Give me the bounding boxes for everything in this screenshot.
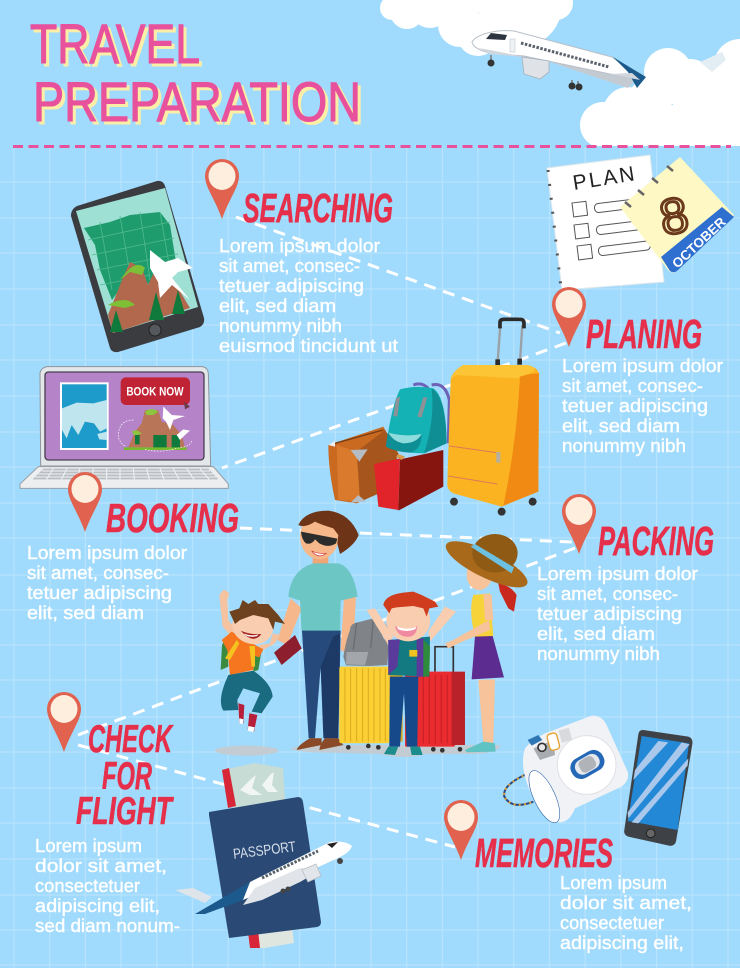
text: planing body: Lorem ipsum dolor [562, 356, 723, 376]
icon: passport with tickets and plane [175, 763, 352, 948]
icon: tablet with map [71, 181, 204, 352]
icon: booking pin [68, 472, 102, 532]
text: searching body [219, 236, 398, 356]
heading: memories: MEMORIES [475, 830, 613, 876]
left boy [219, 589, 285, 732]
yellow suitcase [339, 667, 403, 750]
panel: check for flight [35, 692, 180, 936]
text: searching body: tetuer adipiscing [219, 276, 364, 296]
text: booking body: sit amet, consec- [27, 563, 169, 583]
icon: memories pin [444, 800, 478, 860]
text: packing body [537, 564, 698, 664]
icon: plan notebook and calendar [547, 155, 734, 290]
airplane: top right [472, 31, 646, 90]
panel: searching [205, 159, 398, 356]
heading: searching: SEARCHING [243, 185, 393, 231]
title [30, 12, 364, 136]
text: planing body: sit amet, consec- [562, 376, 703, 396]
icon: laptop booking screen [20, 367, 228, 488]
text: check body: adipiscing elit, [35, 896, 160, 916]
text: planing body: nonummy nibh [562, 436, 686, 456]
text: searching body: Lorem ipsum dolor [219, 236, 380, 256]
text: memories body: adipiscing elit, [560, 933, 684, 953]
text: planing body [562, 356, 723, 456]
text: planing body: tetuer adipiscing [562, 396, 708, 416]
man [277, 511, 359, 750]
icon: plan notebook and calendar: OCTOBER [669, 214, 729, 271]
text: packing body: tetuer adipiscing [537, 604, 682, 624]
text: check body: consectetuer [35, 876, 140, 896]
gray backpack [343, 618, 390, 666]
text: memories body: Lorem ipsum [560, 873, 667, 893]
text: memories body [560, 873, 692, 953]
text: searching body: euismod tincidunt ut [219, 336, 398, 356]
panel: planing [552, 287, 723, 456]
text: check body: sed diam nonum- [35, 916, 180, 936]
title: TRAVEL [30, 12, 200, 75]
text: searching body: nonummy nibh [219, 316, 342, 336]
text: planing body: elit, sed diam [562, 416, 680, 436]
red suitcase [405, 647, 465, 753]
heading: check for flight: CHECK [88, 718, 174, 761]
title: PREPARATION [36, 73, 364, 136]
icon: plan notebook and calendar: 8 [655, 186, 693, 246]
route: dashed connector lines [78, 217, 575, 847]
text: booking body [27, 543, 187, 623]
icon: searching pin [205, 159, 239, 219]
text: booking body: tetuer adipiscing [27, 583, 172, 603]
heading: check for flight [76, 718, 174, 833]
text: booking body: elit, sed diam [27, 603, 144, 623]
icon: instant camera [504, 716, 628, 827]
icon: smartphone [624, 730, 692, 846]
text: packing body: nonummy nibh [537, 644, 660, 664]
panel: packing [537, 494, 714, 664]
text: packing body: sit amet, consec- [537, 584, 678, 604]
panel: booking [27, 472, 239, 623]
middle boy [367, 592, 456, 755]
illustration: family with suitcases [215, 511, 533, 757]
icon: planing pin [552, 287, 586, 347]
icon: passport with tickets and plane: PASSPORT [232, 839, 297, 863]
heading: check for flight: FLIGHT [76, 790, 174, 833]
cloud: top right [580, 39, 740, 148]
text: check body: Lorem ipsum [35, 836, 142, 856]
title: TRAVEL [33, 15, 203, 78]
text: packing body: Lorem ipsum dolor [537, 564, 698, 584]
book [274, 635, 302, 665]
woman [440, 533, 533, 752]
text: booking body: Lorem ipsum dolor [27, 543, 187, 563]
text: memories body: consectetuer [560, 913, 664, 933]
icon: luggage pile [328, 319, 539, 516]
cloud: top centre [380, 0, 573, 56]
text: searching body: sit amet, consec- [219, 256, 360, 276]
text: searching body: elit, sed diam [219, 296, 336, 316]
heading: booking: BOOKING [106, 495, 239, 541]
panel: memories [444, 800, 692, 953]
text: check body: dolor sit amet, [35, 856, 167, 876]
icon: laptop booking screen: BOOK NOW [126, 386, 184, 399]
title: PREPARATION [33, 70, 361, 133]
icon: check pin [47, 692, 81, 752]
text: memories body: dolor sit amet, [560, 893, 692, 913]
text: check body [35, 836, 180, 936]
icon: packing pin [562, 494, 596, 554]
icon: plan notebook and calendar: PLAN [571, 163, 636, 195]
text: packing body: elit, sed diam [537, 624, 655, 644]
heading: check for flight: FOR [102, 755, 152, 798]
